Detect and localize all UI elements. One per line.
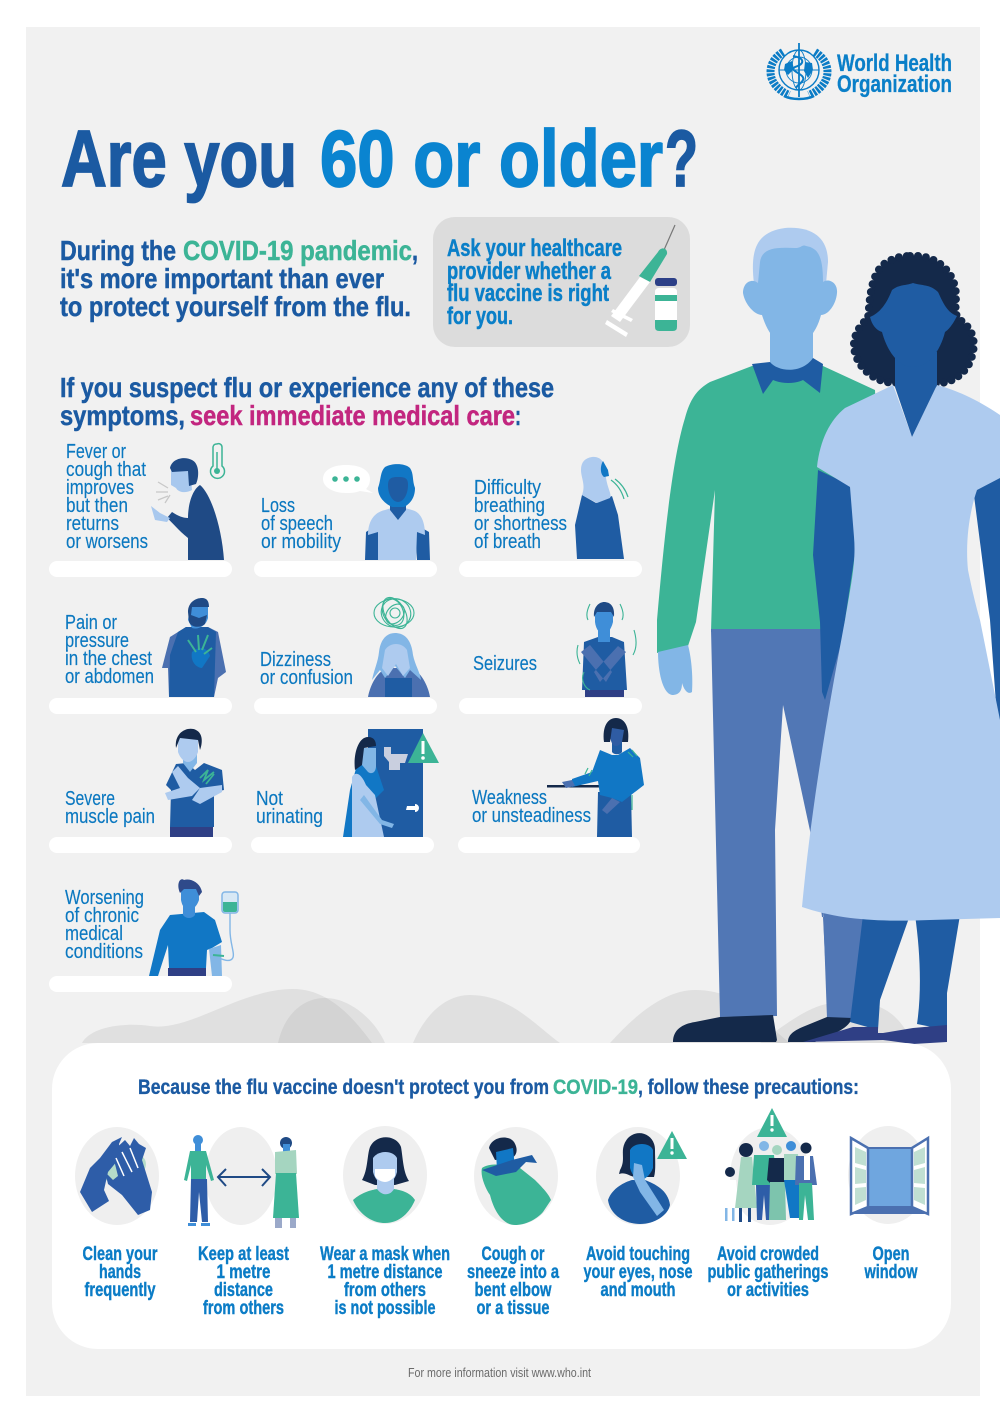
precaution: open window [848,1126,928,1283]
symptom text [66,441,148,553]
caption: Keep at least [198,1244,290,1265]
icon: WHO emblem [771,43,827,99]
symptom: fever or cough [66,441,224,560]
intro text: it's more important than ever [60,263,384,294]
hair [854,256,974,383]
face and ears [743,245,837,348]
symptom text: Worsening [65,887,144,909]
symptom text: or mobility [261,531,341,553]
symptom text: cough that [66,459,146,481]
heading: symptoms: If you suspect flu or experience any of these [60,372,554,403]
symptom text: or shortness [474,513,567,535]
caption: 1 metre [216,1262,270,1283]
icon: window [851,1138,928,1214]
symptom text: conditions [65,941,143,963]
icon: man with drip [149,879,238,976]
decorative hills [82,989,912,1043]
symptom text: returns [66,513,119,535]
dress [802,385,1000,921]
caption: Clean your [82,1244,158,1265]
title [61,114,698,203]
symptom: seizures [473,602,636,697]
precaution: clean hands [75,1127,159,1301]
symptom text: Fever or [66,441,126,463]
callout text [447,235,622,330]
caption: Wear a mask when [320,1244,450,1265]
callout text: flu vaccine is right [447,280,609,307]
symptom: chest pain [65,598,226,697]
title: ? [665,114,698,203]
face [870,283,957,367]
precaution: avoid touching face [584,1127,692,1301]
intro text: , [412,235,418,266]
caption: your eyes, nose [584,1262,692,1283]
title: 60 or older [320,114,663,203]
caption [198,1244,290,1319]
symptom: dizziness [260,593,430,697]
callout text: Ask your healthcare [447,235,622,262]
caption: Avoid crowded [717,1244,819,1265]
symptom text: or unsteadiness [472,805,591,827]
symptom text: Not [256,788,283,810]
symptom text: medical [65,923,123,945]
symptom text: urinating [256,806,323,828]
heading: symptoms [60,372,554,431]
icon: woman in mask [353,1137,415,1223]
symptom text: Severe [65,788,115,810]
precaution: wear a mask [320,1126,450,1319]
precaution: keep distance [184,1127,299,1319]
icon: dizzy woman [368,593,430,697]
logo wordmark [837,50,952,98]
trousers [711,629,863,1017]
caption [320,1244,450,1319]
icon: coughing man [151,444,224,560]
caption [864,1244,918,1283]
intro text: to protect yourself from the flu. [60,291,411,322]
caption: from others [203,1298,284,1319]
intro text: During the [60,235,176,266]
symptom text [474,477,567,553]
symptom text: Loss [261,495,295,517]
woman figure [802,256,1000,1044]
symptom text: of speech [261,513,333,535]
precautions heading: COVID-19 [553,1076,638,1099]
caption: Cough or [482,1244,545,1265]
precaution: avoid crowds [708,1108,828,1301]
icon: two people and arrow [184,1135,299,1228]
symptom text [65,612,154,688]
left arm [813,470,857,700]
caption [708,1244,828,1301]
icon: man with sore arm [165,729,224,837]
legs [850,915,960,1030]
caption: window [864,1262,918,1283]
precautions heading: , follow these precautions: [638,1076,859,1099]
symptom text: but then [66,495,128,517]
icon: man holding chest [162,598,226,697]
icon: vaccine vial [655,278,677,331]
icon: crowd of people [721,1108,817,1222]
precautions heading: Because the flu vaccine doesn't protect you from [138,1076,549,1099]
callout text: provider whether a [447,258,611,285]
symptom: not urinating [256,729,439,837]
icon: person coughing into elbow [482,1137,551,1225]
symptom bars [49,561,642,992]
symptom: muscle pain [65,729,224,837]
heading: symptoms: : [515,400,521,431]
caption: bent elbow [474,1280,552,1301]
caption: and mouth [600,1280,676,1301]
caption: 1 metre distance [328,1262,442,1283]
symptom text: Dizziness [260,649,331,671]
caption: or activities [727,1280,809,1301]
symptom text [65,887,144,963]
hand [658,645,692,695]
icon: syringe [605,225,675,337]
caption: distance [214,1280,273,1301]
neck [895,352,937,437]
shoes [803,1025,947,1044]
logo: World Health Organization [771,43,952,99]
symptom text [65,788,155,828]
symptom text [472,787,591,827]
heading: symptoms: symptoms, [60,400,185,431]
man figure [657,228,880,1042]
heading: symptoms: seek immediate medical care [190,400,515,431]
symptom text: or abdomen [65,666,154,688]
symptom text: of chronic [65,905,139,927]
icon: woman touching face [608,1131,687,1224]
symptom text: Pain or [65,612,117,634]
symptom text: pressure [65,630,129,652]
symptom: chronic conditions [65,879,238,976]
precautions heading [138,1076,859,1099]
symptom text: improves [66,477,134,499]
icon: woman with cane [547,718,644,837]
callout: ask your healthcare provider [433,217,690,347]
logo wordmark: World Health [837,50,952,77]
symptom text: Difficulty [474,477,541,499]
footer: For more information visit www.who.int [408,1365,591,1380]
symptom: weakness [472,718,644,837]
logo wordmark: Organization [837,71,952,98]
caption: hands [99,1262,141,1283]
shoes [673,1015,852,1042]
icon: woman at toilet door [343,729,439,837]
icon: washing hands [80,1137,152,1215]
symptom text: Seizures [473,653,537,675]
panel: precautions [52,1043,951,1349]
caption [82,1244,158,1301]
intro text: COVID-19 pandemic [183,235,412,266]
collar [752,358,823,394]
symptom: difficulty breathing [474,457,628,559]
hair [753,228,828,284]
icon: shaking man [577,602,636,697]
caption: Avoid touching [586,1244,690,1265]
intro text [60,235,418,322]
symptom text [261,495,341,553]
symptom text: breathing [474,495,545,517]
symptom text: muscle pain [65,806,155,828]
caption: or a tissue [476,1298,550,1319]
precaution: cough into elbow [467,1127,559,1319]
neck [770,330,813,374]
symptom text: or worsens [66,531,148,553]
title: Are you [61,114,297,203]
caption [584,1244,692,1301]
callout text: for you. [447,303,513,330]
symptom text: of breath [474,531,541,553]
symptom text: Weakness [472,787,547,809]
caption: is not possible [334,1298,436,1319]
icon: woman short of breath [575,457,628,559]
icon: woman with speech bubble [323,464,430,560]
caption: frequently [84,1280,156,1301]
symptom text: or confusion [260,667,353,689]
caption [467,1244,559,1319]
caption: Open [872,1244,910,1265]
caption: public gatherings [708,1262,828,1283]
symptom text [260,649,353,689]
sweater [657,366,880,653]
caption: sneeze into a [467,1262,559,1283]
right arm [972,470,1000,740]
caption: from others [344,1280,426,1301]
symptom: loss of speech [261,464,430,560]
symptom text [256,788,323,828]
symptom text: in the chest [65,648,152,670]
